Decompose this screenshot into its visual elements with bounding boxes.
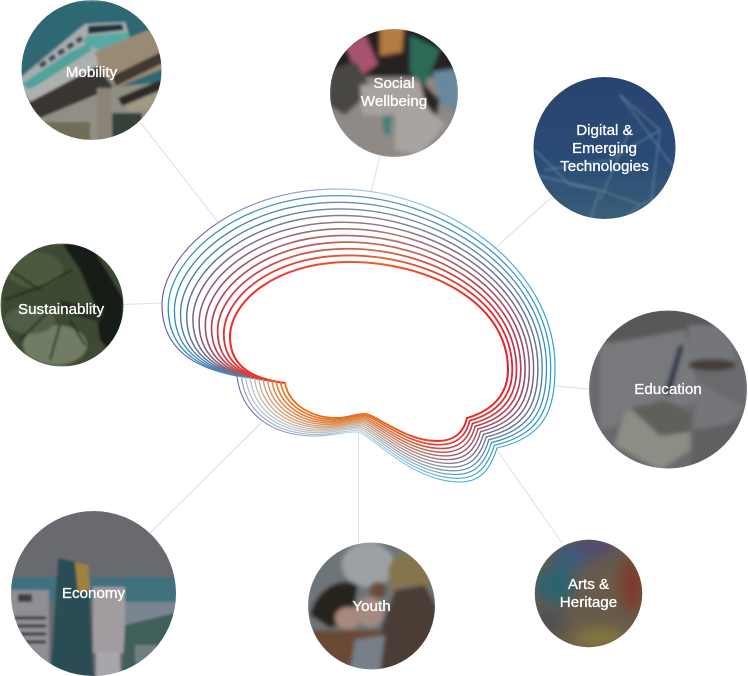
label: Youth [352, 598, 391, 615]
label: Mobility [66, 64, 118, 81]
topic circle: Digital & Emerging Technologies [530, 75, 678, 223]
label: Sustainablity [18, 301, 104, 318]
photo: stacked hands in colourful sleeves [328, 27, 460, 159]
topic circle: Mobility [20, 0, 165, 142]
photo: monorail on elevated track [20, 0, 165, 142]
photo: tree canopy from below [0, 243, 124, 367]
topic circle: Arts & Heritage [533, 536, 645, 650]
photo: city skyline and glass tower [9, 509, 179, 676]
photo: group of young people [306, 541, 438, 672]
label: Social [373, 75, 415, 92]
photo: colourful textured paint [533, 536, 645, 650]
label: Economy [62, 585, 126, 602]
topic circle: Sustainablity [0, 243, 124, 367]
lower lobe contour lines [237, 376, 497, 482]
upper lobe contour lines [162, 189, 555, 448]
label line 2: Wellbeing [361, 93, 427, 110]
topic circle: Economy [9, 509, 179, 676]
label: Arts & [568, 576, 609, 593]
label: Digital & [576, 122, 633, 139]
photo: hand writing with pen [587, 308, 748, 472]
label line 2: Heritage [560, 594, 617, 611]
topic circle: Social Wellbeing [328, 27, 460, 159]
brain outline: nested gradient contour lines [162, 189, 555, 482]
label: Education [634, 381, 702, 398]
label line 2: Emerging [572, 140, 637, 157]
topic circle: Youth [306, 541, 438, 672]
connector lines from brain to topic circles [123, 122, 589, 543]
photo: blue network mesh [530, 75, 678, 223]
label line 3: Technologies [560, 158, 649, 175]
topic circle: Education [587, 308, 748, 472]
